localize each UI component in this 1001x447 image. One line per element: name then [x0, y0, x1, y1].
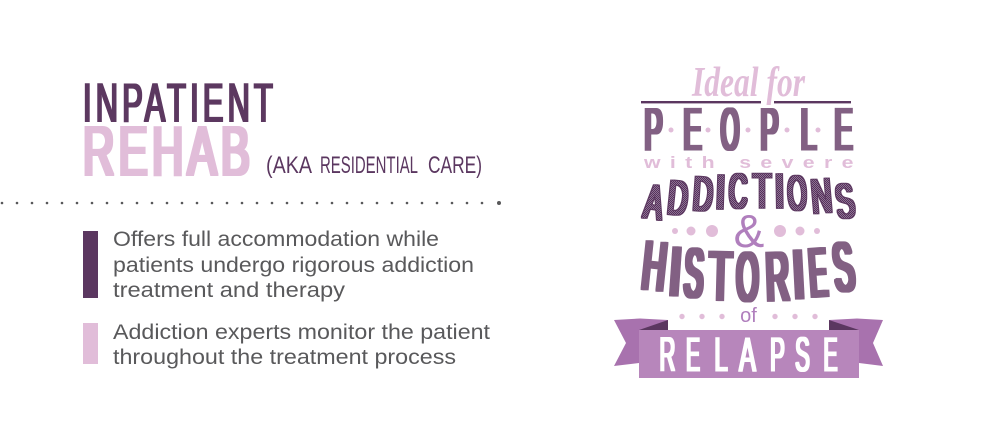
- text: histories: T: [708, 236, 733, 315]
- text: relapse: E: [823, 327, 838, 381]
- text block: full accommodation: treatment and therapy: [113, 279, 346, 302]
- text: relapse: R: [660, 327, 675, 381]
- text: histories: R: [765, 237, 790, 316]
- text: histories: S: [829, 228, 858, 308]
- text: addictions: I: [714, 166, 727, 220]
- text: addictions: S: [832, 174, 858, 230]
- text: histories: H: [639, 226, 670, 307]
- text: addictions: C: [728, 165, 747, 219]
- text: people: P: [644, 96, 663, 163]
- text: histories: [639, 226, 858, 317]
- subheading: aka residential care: RESIDENTIAL: [320, 152, 418, 179]
- text: relapse: [660, 327, 838, 382]
- text: relapse: S: [795, 327, 810, 381]
- text: addictions: I: [773, 165, 786, 219]
- text: of with dots: [679, 305, 818, 327]
- text: addictions: D: [691, 167, 715, 223]
- text: addictions: T: [753, 163, 771, 218]
- text: histories: I: [666, 232, 685, 311]
- text: people: [644, 96, 853, 163]
- text block: addiction experts: [113, 321, 490, 369]
- text block: full accommodation: [113, 228, 474, 302]
- text: histories: S: [683, 235, 705, 313]
- bullet bar: dark: [83, 231, 98, 298]
- ampersand: &: [734, 205, 764, 257]
- rules under ideal for: [641, 101, 851, 103]
- panel: typographic ideal for people badge: [614, 60, 883, 382]
- dots beside ampersand: [672, 225, 820, 237]
- subheading: aka residential care: (AKA: [266, 152, 312, 179]
- text: addictions: A: [641, 175, 667, 231]
- text: relapse: E: [686, 327, 700, 381]
- text: ideal for: Ideal for: [691, 60, 805, 106]
- text: people: P: [760, 96, 779, 163]
- text: relapse: A: [739, 328, 756, 382]
- subheading: aka residential care: CARE): [428, 152, 482, 179]
- text: addictions: [641, 163, 858, 231]
- text: relapse: L: [714, 329, 728, 382]
- text block: addiction experts: throughout the treatment process: [113, 346, 456, 369]
- dotted divider: [1, 201, 501, 205]
- ribbon banner: [614, 318, 883, 382]
- text block: addiction experts: Addiction experts monitor the patient: [113, 321, 490, 344]
- text block: full accommodation: patients undergo rigorous addiction: [113, 254, 474, 277]
- text: of with dots: of: [740, 305, 757, 327]
- text block: full accommodation: Offers full accommodation while: [113, 228, 439, 251]
- text: with severe: with severe: [643, 154, 863, 172]
- text: people: L: [801, 96, 816, 163]
- text: people: O: [721, 96, 739, 163]
- text: people: E: [834, 96, 853, 163]
- text: addictions: N: [809, 169, 834, 225]
- heading: rehab: REHAB: [83, 112, 254, 191]
- text: histories: O: [737, 239, 758, 317]
- text: histories: E: [807, 234, 829, 313]
- bullet bar: light: [83, 323, 98, 364]
- heading: inpatient: INPATIENT: [83, 73, 277, 134]
- dots between people letters: [668, 128, 820, 132]
- panel: inpatient rehab description: [1, 73, 501, 369]
- text: histories: I: [790, 235, 807, 314]
- text: addictions: O: [786, 166, 808, 222]
- text: people: E: [683, 96, 702, 163]
- text: relapse: P: [770, 327, 785, 381]
- text: addictions: D: [665, 171, 690, 227]
